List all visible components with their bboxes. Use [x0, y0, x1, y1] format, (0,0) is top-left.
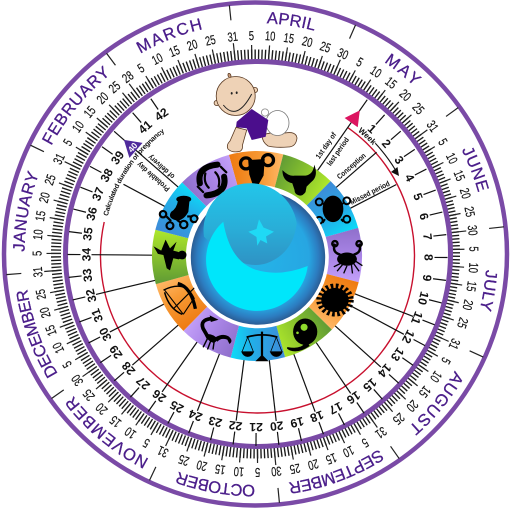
- day-of-month numbers: 5: [61, 137, 76, 149]
- day-of-month numbers: 5: [61, 358, 75, 370]
- week numbers: 28: [119, 358, 138, 378]
- day-of-month numbers: 15: [450, 169, 467, 183]
- icon: capricorn: [154, 240, 186, 270]
- month names: MARCH: [136, 18, 202, 54]
- week numbers: 34: [79, 248, 94, 261]
- month names: JUNE: [462, 148, 489, 192]
- day-of-month numbers: 10: [341, 442, 356, 459]
- icon: sagittarius: [164, 284, 195, 314]
- day-of-month numbers: 15: [324, 450, 338, 466]
- week label with arrow: [358, 127, 399, 176]
- day-of-month numbers: 10: [443, 151, 459, 166]
- wheel annotation labels: of delivery: [147, 153, 177, 180]
- icon: aries: [240, 155, 274, 185]
- week numbers: 9: [420, 274, 434, 282]
- day-of-month numbers: 20: [185, 38, 199, 54]
- day-of-month numbers: 30: [69, 371, 87, 388]
- week numbers: 24: [187, 406, 204, 424]
- day-of-month numbers: 15: [44, 323, 60, 338]
- week numbers: 22: [228, 418, 243, 433]
- day-of-month numbers: 31: [156, 442, 171, 459]
- purple week 40 triangle: [117, 132, 143, 158]
- week numbers: 23: [207, 413, 223, 430]
- day-of-month numbers: 20: [195, 457, 209, 473]
- month names: SEPTEMBER: [288, 450, 384, 494]
- purple week 40 triangle: 40: [126, 140, 140, 154]
- day-of-month numbers: 10: [427, 368, 444, 384]
- white bezel and blue disc: [189, 188, 327, 326]
- month names: APRIL: [266, 12, 314, 31]
- day-of-month numbers: 25: [318, 40, 332, 56]
- day-of-month numbers: 25: [177, 451, 191, 468]
- month names: AUGUST: [411, 370, 462, 436]
- day-of-month numbers: 20: [95, 90, 112, 107]
- week numbers: 27: [133, 373, 153, 393]
- day-of-month numbers: 10: [70, 119, 87, 135]
- day-of-month numbers: 5: [438, 355, 452, 366]
- panel: centre moon disc: [189, 183, 327, 326]
- day-of-month numbers: 28: [120, 69, 137, 86]
- week numbers: 32: [83, 287, 99, 304]
- day-of-month numbers: 5: [141, 435, 152, 450]
- arm: [227, 127, 247, 152]
- icon: cancer: [332, 241, 362, 273]
- day-of-month numbers: 15: [382, 75, 399, 92]
- week numbers: 3: [391, 153, 407, 167]
- week ticks: [68, 99, 447, 446]
- day-of-month numbers: 15: [34, 210, 49, 222]
- month names: NOVEMBER: [66, 396, 148, 469]
- week numbers: 12: [399, 327, 418, 346]
- week numbers: 37: [89, 185, 107, 203]
- wheel annotation labels: [136, 131, 391, 207]
- icon: virgo: [287, 318, 317, 351]
- day-of-month numbers: 25: [288, 460, 301, 476]
- week numbers: 25: [167, 397, 186, 416]
- week numbers: 15: [360, 375, 380, 395]
- day-of-month numbers: [31, 30, 480, 478]
- day-of-month numbers: 25: [454, 316, 470, 330]
- week numbers: 14: [375, 361, 394, 380]
- day-of-month numbers: 20: [94, 400, 111, 417]
- day-of-month numbers: 5: [466, 246, 480, 252]
- month names: DECEMBER: [16, 290, 58, 378]
- week numbers: 38: [97, 166, 116, 185]
- day-of-month numbers: 30: [335, 46, 350, 63]
- five-day ticks: [47, 45, 464, 463]
- icon: aquarius: [160, 196, 198, 229]
- day-of-month numbers: 25: [43, 173, 59, 187]
- wheel annotation labels: Probable day: [136, 160, 172, 192]
- week numbers: 10: [415, 290, 432, 307]
- day-of-month numbers: 25: [81, 386, 98, 403]
- month names: FEBRUARY: [42, 65, 108, 145]
- icon: pisces: [198, 165, 226, 195]
- week label with arrow: Week: [358, 127, 376, 146]
- day-of-month numbers: 31: [445, 336, 462, 351]
- day-of-month numbers: 31: [372, 423, 389, 441]
- day-of-month numbers: 25: [461, 205, 477, 218]
- month names: MAY: [384, 53, 422, 84]
- day-of-month numbers: 15: [108, 412, 124, 429]
- day-of-month numbers: 31: [51, 152, 68, 167]
- day-of-month numbers: 5: [136, 62, 147, 76]
- day-of-month numbers: 5: [249, 30, 254, 44]
- week numbers: 4: [402, 172, 417, 184]
- week numbers: 33: [80, 268, 95, 283]
- month names: JANUARY: [13, 170, 38, 252]
- month names: JULY: [480, 270, 498, 312]
- day-of-month numbers: 20: [456, 187, 472, 201]
- week numbers: 6: [416, 212, 432, 222]
- cyan crescent: [206, 222, 308, 311]
- day-of-month numbers: 5: [359, 435, 370, 449]
- day-of-month numbers: 15: [463, 280, 478, 292]
- inner white week wheel disc with purple ring: [66, 62, 450, 446]
- moon shadow lobe: [204, 183, 297, 265]
- calculated duration label: Calculated duration of pregnancy: [104, 129, 164, 216]
- day-of-month numbers: 10: [51, 340, 68, 355]
- day-of-month numbers: 20: [459, 298, 475, 311]
- day-of-month numbers: 20: [306, 456, 320, 472]
- day-of-month numbers: 5: [354, 56, 365, 70]
- week numbers: 17: [326, 399, 345, 417]
- icon: scorpio: [202, 315, 231, 350]
- day-of-month numbers: 31: [227, 30, 239, 45]
- month names: OCTOBER: [176, 472, 254, 497]
- day-of-month numbers: 20: [37, 191, 53, 205]
- week numbers: 13: [388, 345, 407, 364]
- week numbers: 36: [83, 205, 100, 222]
- week numbers: 42: [152, 105, 171, 124]
- red pregnancy arc: [100, 127, 414, 413]
- day-of-month numbers: 15: [283, 32, 295, 47]
- day-of-month numbers: 25: [409, 101, 426, 118]
- day-of-month numbers: 25: [107, 79, 124, 97]
- wheel annotation labels: last period: [326, 137, 351, 168]
- week numbers: 26: [149, 386, 169, 406]
- week numbers: 30: [96, 325, 115, 343]
- icon: leo: [320, 287, 350, 313]
- week numbers: 18: [308, 407, 326, 425]
- day-of-month numbers: 20: [403, 397, 420, 414]
- daily tick scale: [40, 39, 471, 469]
- week numbers: 8: [421, 254, 436, 261]
- week numbers: 16: [344, 388, 363, 407]
- day-of-month numbers: 10: [123, 424, 139, 441]
- day-of-month numbers: 5: [435, 137, 449, 148]
- day-of-month numbers: 10: [264, 30, 276, 44]
- icon: star: [248, 219, 274, 246]
- wheel annotation labels: 1st day of: [315, 131, 339, 161]
- day-of-month numbers: 15: [214, 461, 227, 476]
- week numbers: 31: [88, 306, 106, 324]
- day-of-month numbers: 15: [82, 104, 99, 121]
- week numbers: [79, 105, 436, 434]
- day-of-month numbers: 10: [367, 64, 383, 81]
- week numbers: 5: [410, 191, 426, 203]
- day-of-month numbers: 15: [416, 383, 433, 400]
- icon: gemini: [316, 196, 350, 224]
- week numbers: 39: [108, 148, 127, 167]
- diaper: [266, 110, 289, 136]
- day-of-month numbers: 10: [465, 262, 480, 273]
- week numbers: 19: [289, 414, 305, 431]
- day-of-month numbers: 20: [396, 87, 413, 104]
- red marker triangle: [345, 106, 366, 127]
- week wheel: [68, 98, 448, 446]
- day-of-month numbers: 10: [150, 51, 165, 68]
- day-of-month numbers: 20: [38, 306, 54, 319]
- radial week lines: [92, 122, 413, 421]
- day-of-month numbers: 10: [32, 229, 46, 241]
- wheel annotation labels: Missed period: [349, 180, 391, 207]
- day-of-month numbers: 31: [423, 118, 440, 135]
- day-of-month numbers: 5: [31, 251, 45, 256]
- icon: libra: [241, 332, 283, 361]
- day-of-month numbers: 30: [270, 463, 282, 478]
- day-of-month numbers: 5: [255, 465, 260, 478]
- baby leg and foot: [262, 132, 297, 147]
- week numbers: 20: [269, 418, 284, 434]
- week numbers: 35: [80, 226, 96, 242]
- wheel annotation labels: Conception: [336, 152, 368, 181]
- day-of-month numbers: 31: [32, 266, 46, 278]
- week numbers: 21: [249, 420, 263, 434]
- shirt: [236, 109, 268, 140]
- week numbers: 7: [420, 233, 435, 241]
- icon: taurus: [282, 165, 316, 196]
- week numbers: 2: [379, 137, 394, 151]
- week numbers: 29: [106, 342, 126, 361]
- day-of-month numbers: 25: [204, 33, 217, 49]
- day-of-month numbers: 25: [390, 409, 407, 427]
- day-of-month numbers: 25: [34, 288, 50, 301]
- week numbers: 41: [135, 117, 155, 137]
- zodiac ring: [152, 151, 362, 361]
- week numbers: 11: [408, 309, 426, 327]
- day-of-month numbers: 30: [464, 224, 479, 236]
- icon: crawling baby: [214, 73, 297, 152]
- week numbers: 1: [365, 121, 379, 137]
- day-of-month numbers: 15: [167, 44, 182, 60]
- head: [214, 73, 258, 116]
- day-of-month numbers: 20: [300, 35, 314, 51]
- day-of-month numbers: 10: [233, 464, 245, 478]
